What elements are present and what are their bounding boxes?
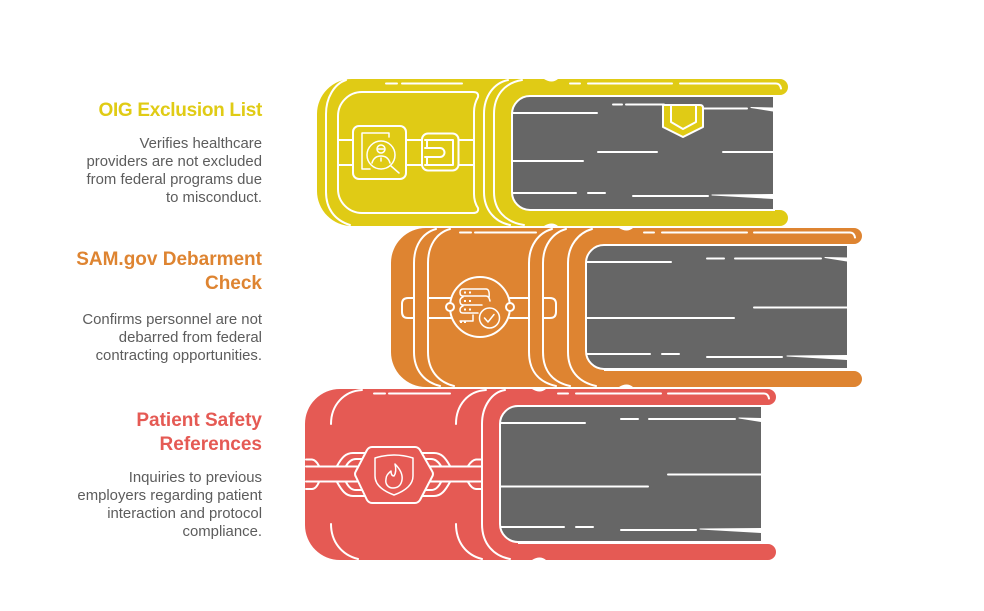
page block (500, 406, 762, 542)
heading (76, 249, 262, 294)
icon: shield with flame (355, 447, 433, 503)
page block (586, 245, 848, 369)
book: SAM.gov Debarment Check (orange) (391, 228, 862, 387)
description (77, 470, 262, 540)
description: Inquiries to previous (129, 470, 262, 486)
description: employers regarding patient (77, 488, 262, 504)
cover notches (544, 79, 558, 226)
description: Verifies healthcare (139, 136, 262, 152)
description: compliance. (183, 524, 262, 540)
heading: Check (205, 273, 262, 294)
bookmark ribbon (663, 105, 703, 137)
book: Patient Safety References (red) (305, 389, 776, 560)
page block (512, 96, 774, 210)
description: interaction and protocol (107, 506, 262, 522)
book: OIG Exclusion List (yellow) (317, 79, 788, 226)
page edge lines (587, 258, 847, 360)
cover details (306, 390, 769, 559)
cover notches (532, 389, 546, 560)
heading: OIG Exclusion List (98, 100, 262, 121)
heading (136, 410, 262, 455)
book cover (305, 389, 776, 560)
description: contracting opportunities. (96, 348, 262, 364)
text block: SAM.gov Debarment Check (76, 249, 262, 364)
description: to misconduct. (166, 190, 262, 206)
icon: server check medallion (446, 277, 514, 337)
heading: References (160, 434, 262, 455)
book cover (317, 79, 788, 226)
cover details (326, 80, 781, 225)
cover details (402, 229, 855, 386)
heading: Patient Safety (136, 410, 262, 431)
description (82, 312, 262, 364)
icon: belt buckle (422, 134, 458, 170)
description: debarred from federal (119, 330, 262, 346)
page edge lines (513, 104, 773, 198)
description: from federal programs due (87, 172, 262, 188)
description: Confirms personnel are not (82, 312, 262, 328)
cover notches (619, 228, 633, 387)
description: providers are not excluded (87, 154, 262, 170)
book cover (391, 228, 862, 387)
icon: person search document (353, 126, 406, 179)
page edge lines (501, 418, 761, 532)
description (86, 136, 262, 206)
heading: SAM.gov Debarment (76, 249, 262, 270)
text block: OIG Exclusion List (86, 100, 262, 206)
text block: Patient Safety References (77, 410, 262, 540)
